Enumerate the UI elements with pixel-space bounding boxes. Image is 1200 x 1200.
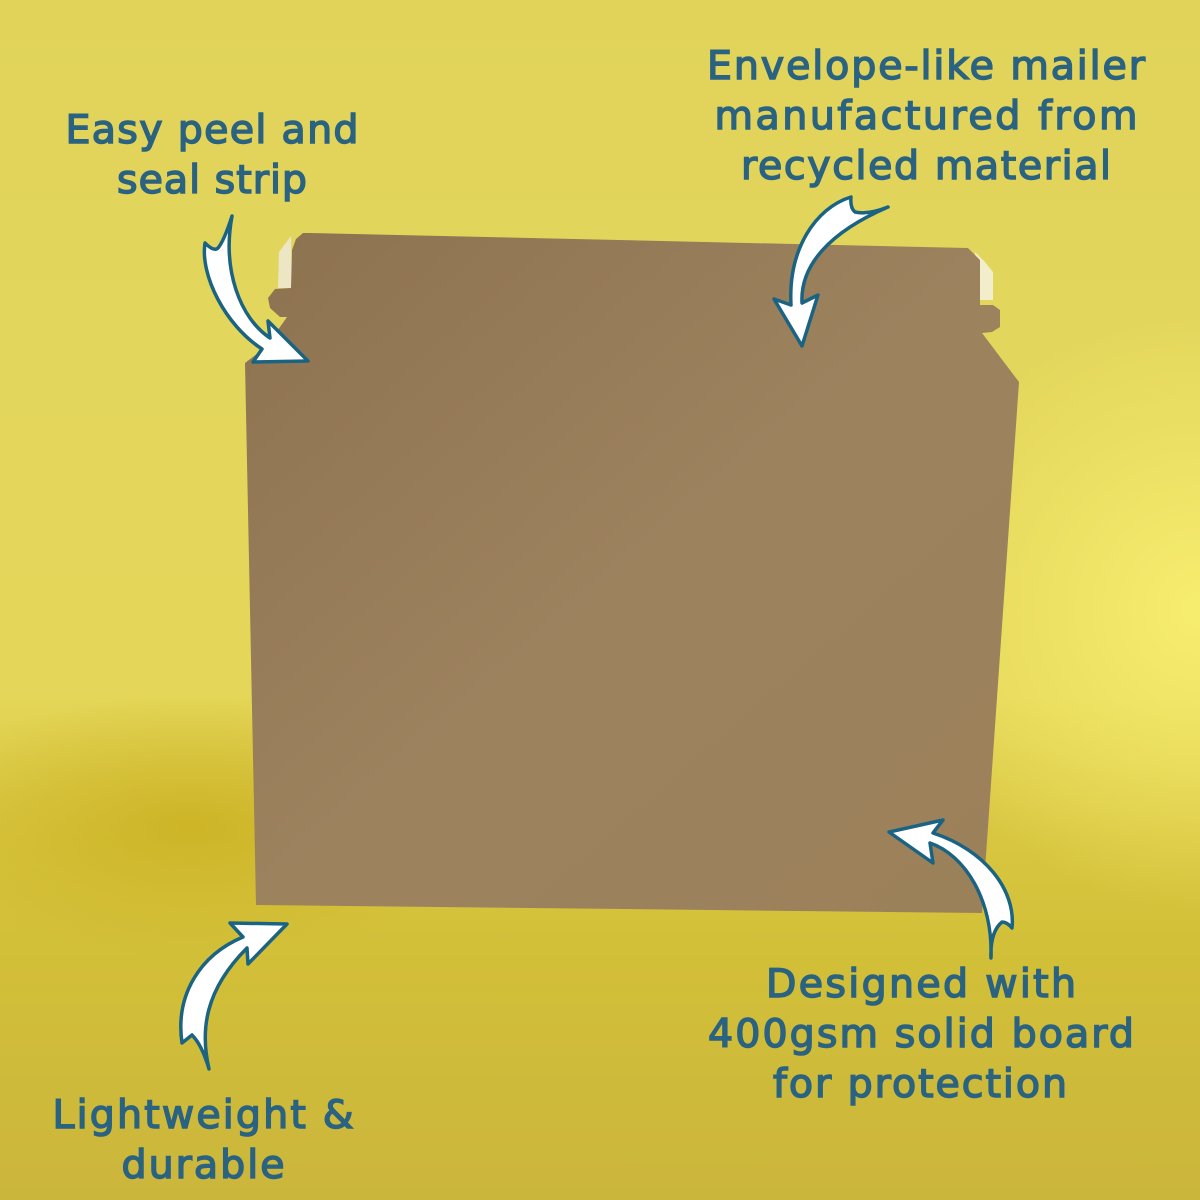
label: solid board: 400gsm solid board [708, 1011, 1134, 1057]
cardboard mailer [245, 233, 1019, 913]
arrow: to board corner [889, 820, 1012, 958]
peel strip: right [975, 252, 993, 300]
label: recycled material: Envelope-like mailer [707, 43, 1146, 89]
label: solid board [708, 961, 1134, 1107]
mailer with peel strip [245, 233, 1019, 913]
label: easy peel: seal strip [117, 157, 307, 203]
label: lightweight: durable [122, 1142, 284, 1188]
label: easy peel: Easy peel and [66, 107, 358, 153]
label: solid board: for protection [773, 1061, 1067, 1107]
label: lightweight: Lightweight & [52, 1092, 354, 1138]
label: recycled material [707, 43, 1146, 189]
label: lightweight [52, 1092, 354, 1188]
label: recycled material: manufactured from [714, 93, 1138, 139]
label: solid board: Designed with [766, 961, 1076, 1007]
label: recycled material: recycled material [741, 143, 1111, 189]
label: easy peel [66, 107, 358, 203]
arrow: to top edge [774, 197, 888, 346]
arrow: to peel strip [204, 216, 308, 362]
arrow: to bottom edge [181, 923, 287, 1069]
peel strip: left [278, 236, 292, 288]
